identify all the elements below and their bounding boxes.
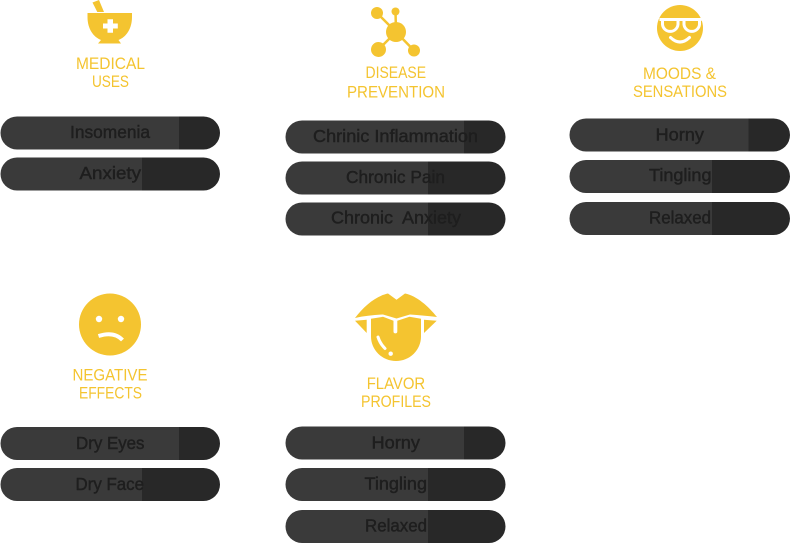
bar: Relaxed: Relaxed [649, 208, 711, 228]
bar: Tingling: Tingling [364, 474, 427, 494]
bar: Insomenia [0, 116, 220, 150]
heading: negative effects: EFFECTS [79, 384, 142, 402]
bar: Relaxed [569, 202, 790, 236]
bar: Tingling [285, 468, 506, 502]
bar: Chronic Anxiety [285, 202, 506, 236]
heading: disease prevention [347, 64, 445, 102]
bar: Dry Eyes [0, 427, 220, 461]
panel: moods and sensations [569, 5, 790, 236]
bar: Dry Eyes: Dry Eyes [76, 433, 145, 453]
heading: medical uses: MEDICAL [76, 55, 145, 73]
icon: sad face [79, 294, 141, 356]
panel: medical uses [0, 0, 220, 191]
heading: flavor profiles: FLAVOR [367, 375, 425, 393]
heading: moods and sensations: SENSATIONS [633, 83, 727, 101]
panel: flavor profiles [285, 294, 506, 543]
bar: Chrinic Inflammation [285, 120, 506, 154]
bar: Anxiety [0, 157, 220, 191]
bar: Dry Face [0, 468, 220, 502]
heading: medical uses: USES [92, 73, 129, 91]
bar: Anxiety: Anxiety [80, 163, 141, 183]
bar: Horny: Horny [656, 124, 704, 144]
panel: disease prevention [285, 7, 506, 236]
bar: Relaxed [285, 510, 506, 543]
heading: disease prevention: PREVENTION [347, 84, 445, 102]
icon: lips and tongue [355, 294, 437, 361]
heading: medical uses [76, 55, 145, 91]
heading: flavor profiles: PROFILES [361, 393, 431, 411]
bar: Horny [285, 426, 506, 460]
icon: molecule [371, 7, 420, 57]
heading: negative effects [72, 366, 148, 402]
bar: Chronic Pain: Chronic Pain [346, 167, 445, 187]
bar: Relaxed: Relaxed [365, 516, 427, 536]
bar: Tingling: Tingling [649, 165, 712, 185]
heading: moods and sensations: MOODS & [643, 65, 716, 83]
heading: negative effects: NEGATIVE [72, 366, 148, 384]
heading: moods and sensations [633, 65, 727, 101]
bar: Dry Face: Dry Face [76, 474, 144, 494]
icon: mortar and pestle [88, 0, 132, 44]
bar: Chronic Pain [285, 161, 506, 195]
bar: Tingling [569, 160, 790, 194]
bar: Chrinic Inflammation: Chrinic Inflammation [313, 126, 478, 146]
bar: Horny: Horny [372, 432, 420, 452]
heading: disease prevention: DISEASE [366, 64, 426, 82]
bar: Horny [569, 118, 790, 152]
panel: negative effects [0, 294, 220, 502]
heading: flavor profiles [361, 375, 431, 411]
bar: Insomenia: Insomenia [70, 122, 150, 142]
bar: Chronic Anxiety: Chronic Anxiety [331, 208, 461, 228]
icon: smiling face with glasses [657, 5, 703, 51]
